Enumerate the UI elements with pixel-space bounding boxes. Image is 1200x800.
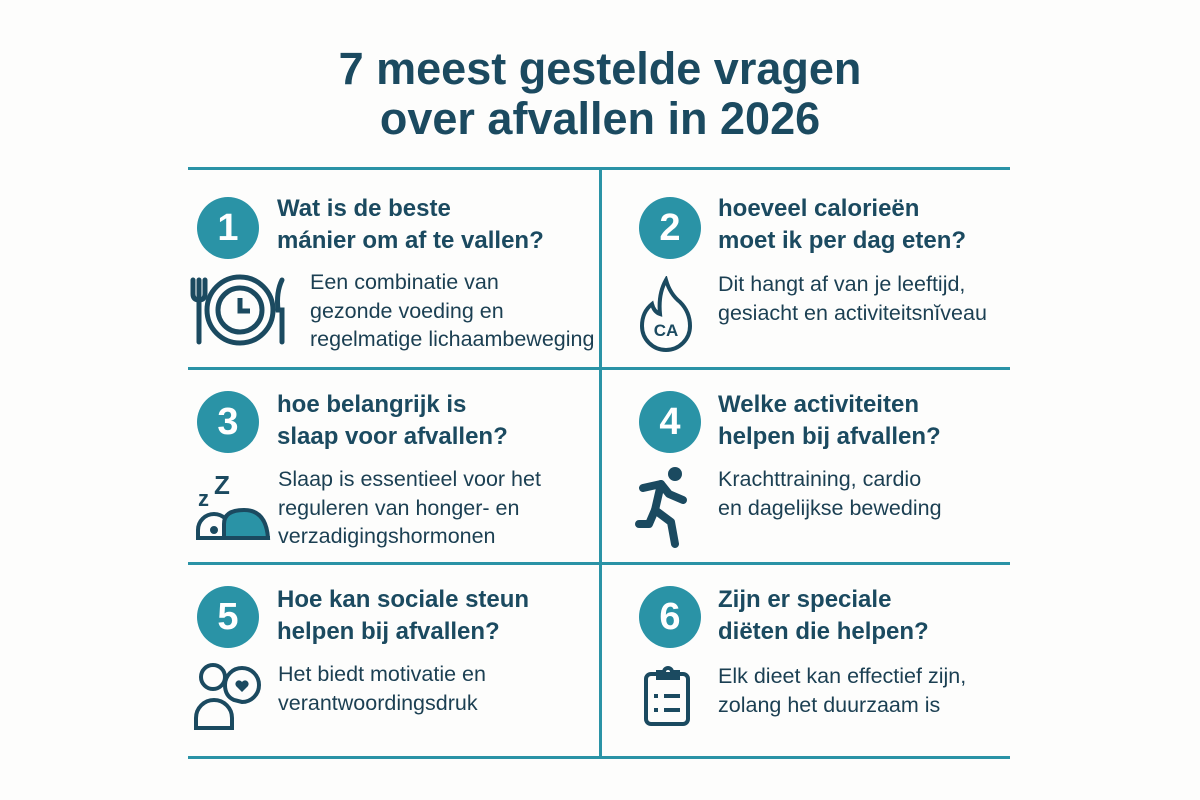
panel: question 6 [639,586,966,726]
heading 2 [718,195,966,254]
number 3 [197,391,259,453]
answer 3: reguleren van honger- en [278,496,519,520]
answer 4: Krachttraining, cardio [718,467,921,491]
panel: question 4 [635,391,942,548]
answer 6 [718,664,966,716]
icon: sleep: Z [214,470,230,500]
answer 6: zolang het duurzaam is [718,692,940,716]
answer 4 [718,467,942,520]
number 1: 1 [217,207,239,249]
title: over afvallen in 2026 [380,93,820,144]
icon: flame CA: CA [654,321,678,340]
answer 2: gesiacht en activiteitsnĭveau [718,300,987,324]
answer 3: Slaap is essentieel voor het [278,467,541,491]
icon: flame CA [640,276,692,352]
icon: sleep [196,470,270,540]
heading 3: hoe belangrijk is [277,391,466,418]
answer 5 [278,662,486,714]
heading 1: mánier om af te vallen? [277,227,544,254]
answer 3: verzadigingshormonen [278,524,496,548]
number 4 [639,391,701,453]
number 2: 2 [659,207,681,249]
heading 4: Welke activiteiten [718,391,919,418]
panel: question 5 [194,586,529,730]
heading 1 [277,195,544,254]
heading 2: hoeveel calorieën [718,195,919,222]
heading 5: Hoe kan sociale steun [277,586,529,613]
answer 2 [718,272,987,324]
icon: plate with clock [190,274,284,346]
heading 5: helpen bij afvallen? [277,618,500,645]
heading 3: slaap voor afvallen? [277,423,508,450]
icon: sleep: z [198,486,209,511]
heading 1: Wat is de beste [277,195,451,222]
answer 1 [310,270,594,351]
panel: question 3 [196,391,541,548]
heading 6 [718,586,929,645]
panel: question 2 [639,195,987,352]
heading 6: diëten die helpen? [718,618,929,645]
answer 1: gezonde voeding en [310,298,504,322]
number 6 [639,586,701,648]
answer 1: Een combinatie van [310,270,499,294]
number 4: 4 [659,401,681,443]
answer 5: verantwoordingsdruk [278,690,478,714]
answer 6: Elk dieet kan effectief zijn, [718,664,966,688]
title: 7 meest gestelde vragen [339,43,861,94]
panel: question 1 [190,195,594,351]
heading 5 [277,586,529,645]
heading 4 [718,391,941,450]
heading 2: moet ik per dag eten? [718,227,966,254]
icon: clipboard [644,666,690,726]
heading 3 [277,391,508,450]
number 5 [197,586,259,648]
answer 4: en dagelijkse beweding [718,496,942,520]
number 5: 5 [217,596,239,638]
icon: social support [194,663,261,730]
answer 1: regelmatige lichaambeweging [310,327,594,351]
answer 3 [278,467,541,548]
heading 4: helpen bij afvallen? [718,423,941,450]
number 3: 3 [217,401,239,443]
number 2 [639,197,701,259]
title [339,43,861,144]
number 1 [197,197,259,259]
icon: runner [635,467,687,548]
answer 2: Dit hangt af van je leeftijd, [718,272,965,296]
heading 6: Zijn er speciale [718,586,891,613]
answer 5: Het biedt motivatie en [278,662,486,686]
number 6: 6 [659,596,681,638]
